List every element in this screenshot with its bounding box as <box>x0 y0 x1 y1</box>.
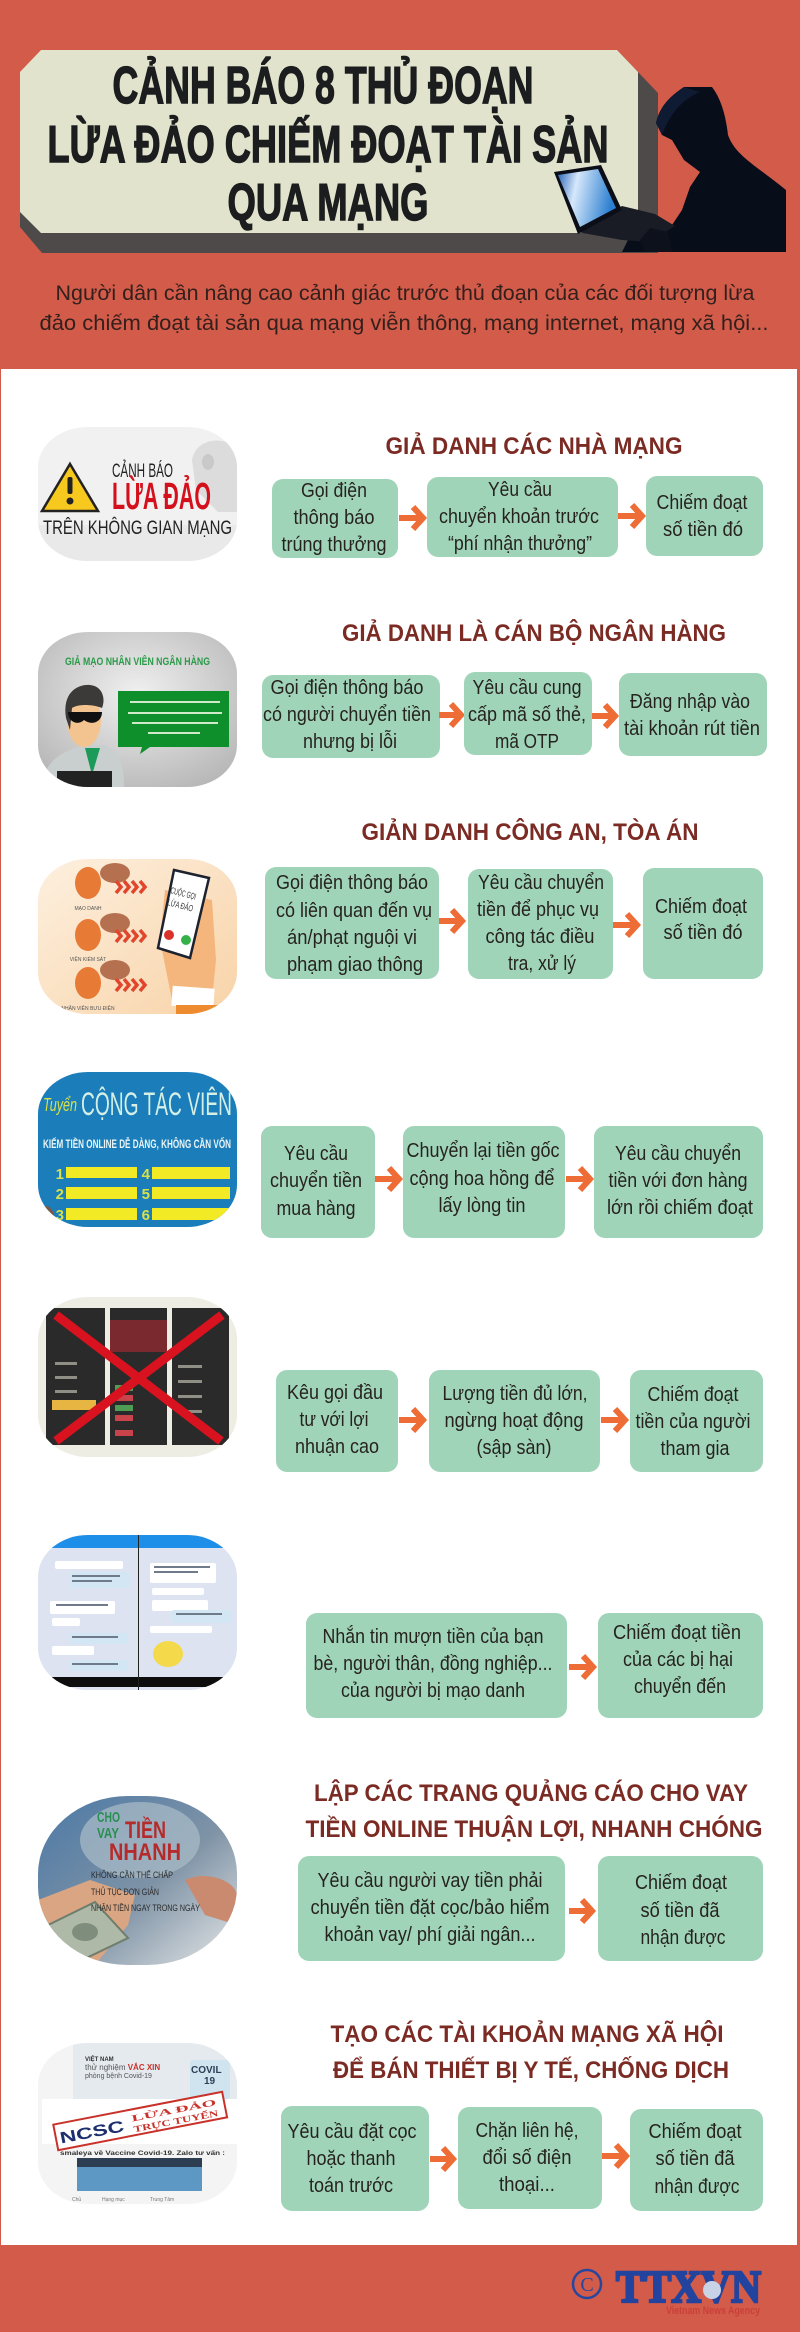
step 3: Đăng nhập vào <box>630 690 750 713</box>
step 1: Yêu cầu đặt cọc <box>288 2120 416 2143</box>
step 2: đổi số điện <box>482 2146 572 2169</box>
image: fake bank staff: GIẢ MẠO NHÂN VIÊN NGÂN HÀNG <box>65 655 210 668</box>
heading: CẢNH BÁO 8 THỦ ĐOẠN <box>112 56 534 115</box>
step 2: nhận được <box>640 1926 726 1949</box>
step 3: lớn rồi chiếm đoạt <box>607 1196 753 1219</box>
image: fake bank staff <box>38 632 237 787</box>
image: vaccine online fraud: TRỰC TUYẾN <box>133 2108 220 2134</box>
image: vaccine online fraud: smaleya về Vaccine Covid-19. Zalo tư vấn : <box>60 2150 225 2157</box>
step 3: tiền của người <box>636 1410 750 1433</box>
step 1 <box>276 1370 398 1472</box>
step 1: của người bị mạo danh <box>341 1679 525 1702</box>
panel: section 6 <box>38 1535 763 1718</box>
step 2: cộng hoa hồng để <box>410 1167 554 1190</box>
arrow <box>439 910 462 932</box>
step 2: Chiếm đoạt tiền <box>613 1621 741 1644</box>
image: quick online loan: VAY <box>97 1825 119 1842</box>
image: vaccine online fraud: VIỆT NAM <box>85 2055 114 2063</box>
step 3: số tiền đó <box>663 518 743 541</box>
panel: section 2 <box>38 618 767 787</box>
step 3 <box>594 1126 763 1238</box>
image: vaccine online fraud: 19 <box>204 2076 216 2087</box>
step 3: Chiếm đoạt <box>648 1383 739 1406</box>
step 1: Nhắn tin mượn tiền của bạn <box>322 1625 544 1648</box>
arrow <box>399 1409 423 1431</box>
step 2: Chiếm đoạt <box>635 1871 727 1894</box>
step 3: Yêu cầu chuyển <box>615 1142 741 1165</box>
image: vaccine online fraud: phòng bệnh Covid-19 <box>85 2073 152 2080</box>
image: recruiting collaborators: 2 <box>56 1186 64 1203</box>
arrow <box>430 2148 453 2170</box>
banner panel <box>20 50 638 233</box>
step 1: Gọi điện <box>301 479 367 502</box>
step 1: bè, người thân, đồng nghiệp... <box>314 1652 552 1675</box>
image: scam warning <box>38 427 237 561</box>
heading: TẠO CÁC TÀI KHOẢN MẠNG XÃ HỘI <box>330 2019 724 2048</box>
step 1: có liên quan đến vụ <box>276 899 432 922</box>
step 2: Yêu cầu chuyển <box>478 871 604 894</box>
image: scam phone call: MẠO DANH <box>75 906 102 912</box>
step 3: Chiếm đoạt <box>656 491 748 514</box>
step 1 <box>272 479 398 558</box>
step 1: thông báo <box>294 506 374 529</box>
step 3: nhận được <box>654 2175 740 2198</box>
step 2: số tiền đã <box>640 1899 720 1922</box>
step 2 <box>598 1856 763 1961</box>
arrow <box>601 1409 625 1431</box>
image: scam warning: TRÊN KHÔNG GIAN MẠNG <box>43 517 232 539</box>
heading line 2: TIỀN ONLINE THUẬN LỢI, NHANH CHÓNG <box>306 1815 762 1843</box>
step 1 <box>265 867 439 979</box>
image: scam phone call <box>38 859 237 1017</box>
image: recruiting collaborators: 1 <box>56 1166 64 1183</box>
image: recruiting collaborators: Tuyển <box>43 1095 77 1115</box>
image: quick online loan <box>38 1796 237 1965</box>
heading: LẬP CÁC TRANG QUẢNG CÁO CHO VAY <box>314 1778 748 1807</box>
image: quick online loan: NHANH <box>109 1839 181 1866</box>
panel: section 4 <box>37 1072 763 1238</box>
image: recruiting collaborators <box>37 1072 237 1238</box>
image: chat screenshots <box>38 1535 237 1690</box>
image: quick online loan: CHO <box>97 1809 120 1826</box>
image: crossed-out trading app <box>38 1297 237 1457</box>
step 2: ngừng hoạt động <box>444 1409 584 1432</box>
image: recruiting collaborators: 5 <box>142 1186 150 1203</box>
banner shadow <box>20 50 658 253</box>
copyright mark <box>573 2270 601 2298</box>
step 2: cấp mã số thẻ, <box>468 703 586 726</box>
arrow <box>602 2145 626 2167</box>
step 1: Gọi điện thông báo <box>276 871 428 894</box>
arrow <box>375 1168 399 1190</box>
step 1: tư với lợi <box>300 1408 368 1431</box>
step 2 <box>598 1613 763 1718</box>
globe <box>703 2281 721 2299</box>
image: recruiting collaborators: 6 <box>142 1207 150 1224</box>
intro text: Người dân cần nâng cao cảnh giác trước thủ đoạn của các đối tượng lừa <box>56 282 755 305</box>
arrow <box>618 505 642 527</box>
panel: section 8 <box>38 2019 763 2211</box>
step 2 <box>468 869 613 979</box>
step 2: chuyển đến <box>634 1675 726 1698</box>
heading: GIẢ DANH CÁC NHÀ MẠNG <box>386 431 682 460</box>
step 1: toán trước <box>309 2174 393 2197</box>
heading: GIẢ DANH LÀ CÁN BỘ NGÂN HÀNG <box>342 618 726 647</box>
step 2: Yêu cầu <box>488 478 552 501</box>
step 2: “phí nhận thưởng” <box>448 532 592 555</box>
step 2: Lượng tiền đủ lớn, <box>442 1382 588 1405</box>
step 2 <box>458 2107 602 2209</box>
image: vaccine online fraud: Hạng mục <box>102 2197 125 2203</box>
step 1: án/phạt nguội vi <box>287 926 417 949</box>
step 1: Gọi điện thông báo <box>270 676 424 699</box>
step 1: Yêu cầu người vay tiền phải <box>318 1869 542 1892</box>
image: quick online loan: KHÔNG CẦN THẾ CHẤP <box>91 1870 173 1880</box>
step 1: có người chuyển tiền <box>263 703 431 726</box>
image: scam warning: LỪA ĐẢO <box>112 474 211 518</box>
image: vaccine online fraud: COVIL <box>191 2065 222 2076</box>
step 1: phạm giao thông <box>287 953 423 976</box>
step 2 <box>464 672 592 755</box>
arrow <box>569 1656 593 1678</box>
step 1: chuyển tiền đặt cọc/bảo hiểm <box>310 1896 550 1919</box>
arrow <box>566 1168 590 1190</box>
arrow <box>569 1900 592 1922</box>
step 2 <box>429 1370 600 1472</box>
step 1 <box>261 1126 375 1238</box>
step 1: chuyển tiền <box>270 1169 362 1192</box>
image: recruiting collaborators: 3 <box>56 1207 64 1224</box>
footer logo: TTXVN <box>573 2261 761 2317</box>
image: vaccine online fraud: NCSC <box>59 2118 126 2147</box>
step 1 <box>298 1856 565 1961</box>
arrow <box>399 507 423 529</box>
step 2 <box>403 1126 565 1238</box>
step 3: số tiền đó <box>664 921 742 944</box>
step 1 <box>262 675 440 758</box>
step 3 <box>643 868 763 979</box>
step 3: Chiếm đoạt <box>648 2120 742 2143</box>
heading <box>48 56 608 232</box>
step 1: trúng thưởng <box>282 533 386 556</box>
step 1: hoặc thanh <box>306 2147 396 2170</box>
step 2: công tác điều <box>486 925 594 948</box>
image: scam phone call: NHÂN VIÊN BƯU ĐIỆN <box>61 1004 115 1012</box>
step 3 <box>646 476 763 556</box>
step 2: (sập sàn) <box>476 1436 552 1459</box>
step 1 <box>281 2106 429 2211</box>
image: recruiting collaborators: 4 <box>142 1166 151 1183</box>
step 2: Chặn liên hệ, <box>476 2119 578 2142</box>
step 2: tra, xử lý <box>508 952 577 975</box>
step 2: tiền để phục vụ <box>477 898 599 921</box>
image: recruiting collaborators: KIẾM TIỀN ONLINE DỄ DÀNG, KHÔNG CẦN VỐN <box>43 1136 231 1151</box>
step 3 <box>619 673 767 756</box>
step 2: của các bị hại <box>623 1648 733 1671</box>
step 3 <box>630 2109 763 2211</box>
step 2: mã OTP <box>495 730 559 753</box>
step 1: khoản vay/ phí giải ngân... <box>324 1923 536 1946</box>
arrow <box>613 914 637 936</box>
step 3: tài khoản rút tiền <box>624 717 760 740</box>
step 1 <box>306 1613 567 1718</box>
step 2: chuyển khoản trước <box>439 505 599 528</box>
image: vaccine online fraud: LỪA ĐẢO <box>131 2097 217 2123</box>
agency name: Vietnam News Agency <box>666 2305 761 2317</box>
step 1: nhuận cao <box>295 1435 379 1458</box>
heading: QUA MẠNG <box>228 174 428 232</box>
image: recruiting collaborators: CỘNG TÁC VIÊN <box>81 1086 232 1122</box>
image: vaccine online fraud: Chủ <box>72 2196 81 2203</box>
step 3: tiền với đơn hàng <box>608 1169 748 1192</box>
title banner <box>20 50 658 253</box>
step 1: Kêu gọi đầu <box>287 1381 383 1404</box>
step 3: tham gia <box>660 1437 730 1460</box>
image: scam phone call: CUỘC GỌI <box>169 885 197 902</box>
image: scam phone call: LỪA ĐẢO <box>166 896 194 914</box>
step 2: Yêu cầu cung <box>472 676 582 699</box>
image: quick online loan: NHẬN TIỀN NGAY TRONG NGÀY <box>91 1903 200 1913</box>
image: scam warning: CẢNH BÁO <box>112 460 173 482</box>
step 1: nhưng bị lỗi <box>303 730 397 753</box>
step 2 <box>427 477 618 557</box>
icon: hacker with laptop <box>554 87 786 252</box>
step 2: lấy lòng tin <box>438 1194 526 1217</box>
intro text <box>40 282 769 335</box>
image: vaccine online fraud: thử nghiệm VẮC XIN <box>85 2063 160 2072</box>
panel: section 1 <box>38 427 763 561</box>
step 1: mua hàng <box>276 1197 356 1220</box>
arrow <box>592 705 615 727</box>
step 2: thoại... <box>499 2173 555 2196</box>
step 3 <box>630 1370 763 1472</box>
heading line 2: ĐỂ BÁN THIẾT BỊ Y TẾ, CHỐNG DỊCH <box>333 2056 729 2084</box>
image: vaccine online fraud <box>38 2043 237 2204</box>
step 3: Chiếm đoạt <box>655 895 747 918</box>
step 1: Yêu cầu <box>284 1142 348 1165</box>
panel: section 3 <box>38 817 763 1017</box>
panel: section 7 <box>38 1778 763 1965</box>
copyright mark: C <box>580 2274 594 2296</box>
step 3: số tiền đã <box>656 2147 735 2170</box>
image: vaccine online fraud: Trung Tâm <box>150 2197 174 2203</box>
wordmark: TTXVN <box>616 2261 761 2312</box>
image: scam phone call: VIỆN KIỂM SÁT <box>70 955 106 963</box>
arrow <box>439 704 461 726</box>
intro text: đảo chiếm đoạt tài sản qua mạng viễn thông, mạng internet, mạng xã hội... <box>40 312 769 335</box>
image: quick online loan: TIỀN <box>125 1816 166 1844</box>
image: quick online loan: THỦ TỤC ĐƠN GIẢN <box>91 1886 159 1897</box>
panel: section 5 <box>38 1297 763 1472</box>
heading: GIẢN DANH CÔNG AN, TÒA ÁN <box>362 817 698 846</box>
step 2: Chuyển lại tiền gốc <box>406 1139 560 1162</box>
